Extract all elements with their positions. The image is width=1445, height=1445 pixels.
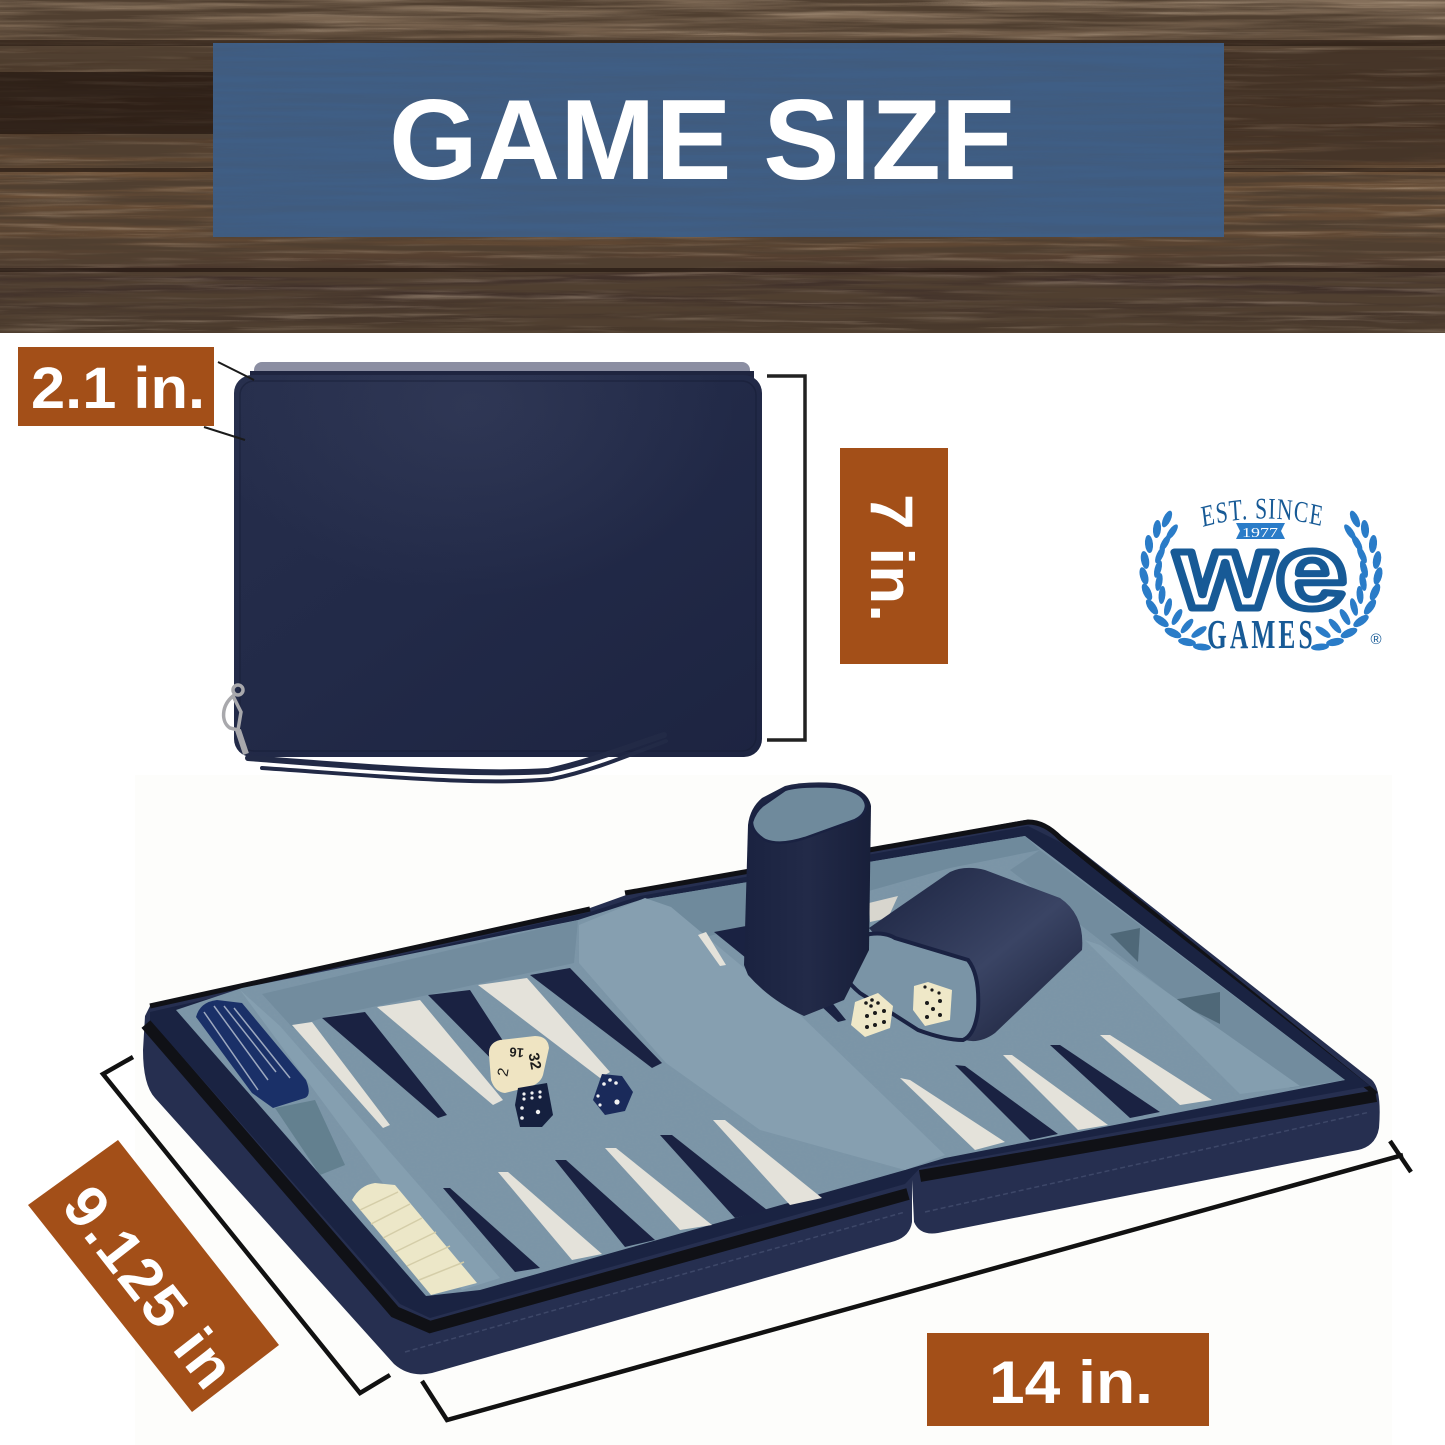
zipper [146, 1024, 1376, 1327]
logo: 1977 ribbon: 1977 [1242, 526, 1278, 541]
felt center fold [579, 898, 945, 1170]
case zipper edge [254, 362, 750, 382]
photo backdrop [135, 775, 1392, 1445]
icon: clasp [224, 685, 246, 754]
dimension label: 14 in.: 14 in. [989, 1349, 1153, 1416]
cup opening [841, 934, 978, 1040]
stack of navy checkers [196, 1000, 309, 1108]
stack of cream checkers [352, 1183, 477, 1295]
open game board [143, 782, 1380, 1374]
logo: est since [1200, 498, 1322, 527]
dimension: height bracket [767, 376, 805, 740]
board points lower right [900, 1035, 1212, 1150]
logo: registered mark: ® [1370, 631, 1382, 648]
dimension label: 9.125 in: 9.125 in [50, 1173, 248, 1401]
upright dice cup [744, 782, 871, 1016]
dimension label: 7 in.: 7 in. [858, 494, 925, 622]
icon: laurel right [1311, 509, 1384, 651]
dimension label: 2.1 in. [18, 347, 214, 426]
cup opening [752, 786, 866, 843]
board points upper left [292, 968, 662, 1128]
dimension: length line [103, 1057, 390, 1393]
navy die 1 [515, 1083, 553, 1127]
header: wood background [0, 0, 1445, 333]
logo: WE Games [1139, 498, 1382, 658]
logo: est since: EST. SINCE [1200, 498, 1322, 527]
stitching [405, 1112, 1370, 1352]
dimension label: 7 in. [840, 448, 948, 664]
logo: games: GAMES [1207, 613, 1316, 658]
doubling cube [489, 1036, 549, 1093]
dimension label: 14 in. [927, 1333, 1209, 1426]
logo: 1977 ribbon [1236, 523, 1285, 541]
case front [234, 375, 762, 757]
wrist strap [248, 735, 666, 781]
doubling cube: 2 [494, 1067, 513, 1078]
board points lower left [443, 1120, 822, 1272]
title: GAME SIZE [389, 77, 1017, 204]
felt back wall right [640, 836, 1040, 937]
felt left tray divider [240, 990, 500, 1290]
navy die 2 [593, 1074, 633, 1115]
felt back wall left [262, 920, 578, 1028]
doubling cube: 16 [509, 1044, 524, 1061]
dimension: depth leader lines [204, 362, 254, 440]
closed game case [224, 362, 762, 781]
felt right tray ridges [1010, 850, 1345, 1094]
icon: laurel left [1138, 509, 1211, 651]
cream die 1 [851, 993, 893, 1037]
case outer shell [143, 820, 1380, 1374]
dimension label: 2.1 in.: 2.1 in. [31, 356, 205, 421]
felt tray [176, 836, 1345, 1296]
doubling cube: 32 [525, 1052, 544, 1071]
cream die 2 [913, 982, 952, 1026]
dimension label: 9.125 in [28, 1140, 279, 1412]
lying dice cup [841, 868, 1082, 1041]
heading banner [213, 43, 1224, 237]
logo: we: we [1174, 513, 1347, 631]
dimension: width line [422, 1141, 1411, 1420]
board points upper right [698, 896, 898, 1022]
inner rim [150, 826, 1370, 1318]
